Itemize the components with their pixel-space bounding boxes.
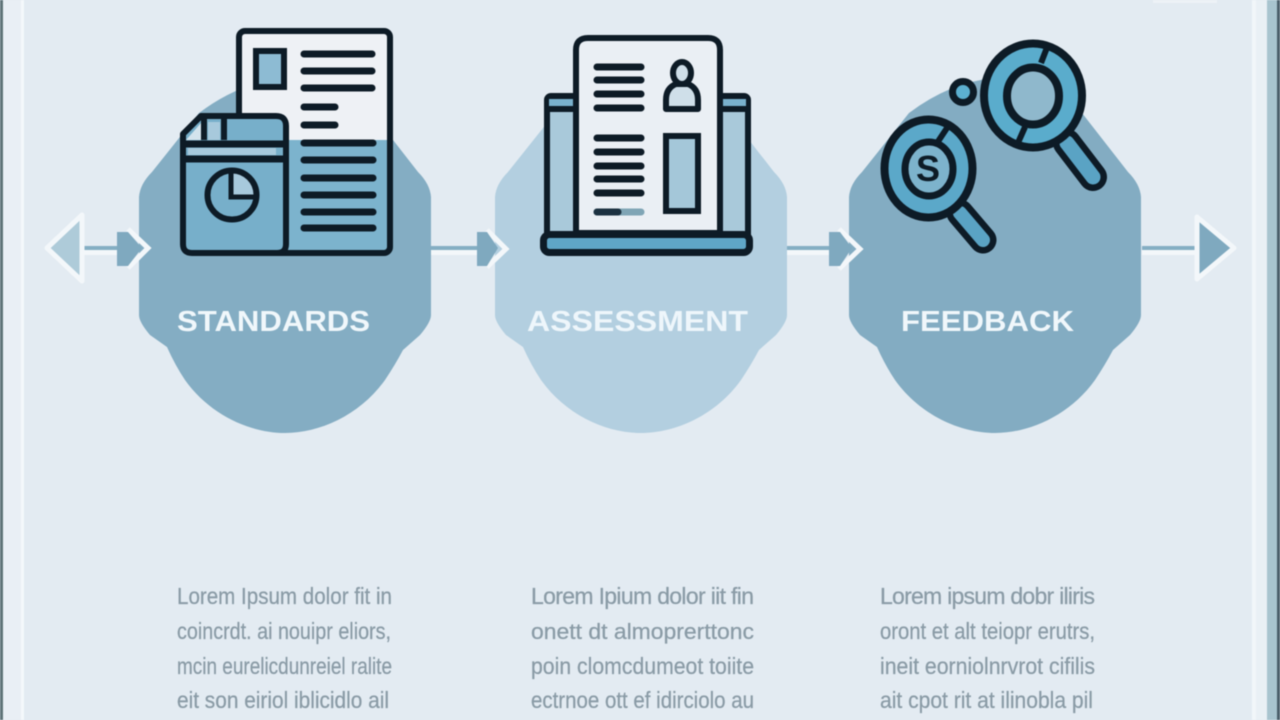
icon part: front card with pie (183, 114, 286, 253)
text block: assessment description: onett dt almoprerttonc (531, 619, 754, 644)
panel: feedback blob (849, 78, 1141, 433)
panel: assessment blob (495, 78, 787, 433)
arrow: double-headed start arrow (47, 215, 148, 281)
heading: assessment: ASSESSMENT (527, 306, 748, 338)
text block: assessment description: Lorem Ipium dolor iit fin (531, 583, 754, 609)
text block: standards description: Lorem Ipsum dolor fit in (177, 583, 392, 609)
icon part: large magnifier (984, 44, 1093, 177)
icon: magnifying glasses (884, 44, 1093, 240)
text block: assessment description (531, 583, 754, 713)
icon part: laptop frame (544, 96, 750, 252)
text block: feedback description: ait cpot rit at ilinobla pil (880, 687, 1093, 713)
text block: feedback description: ineit eorniolnrvrot cifilis (880, 653, 1095, 679)
arrow: assessment to feedback (787, 229, 860, 269)
icon part: small circle (952, 82, 974, 102)
text block: assessment description: poin clomcdumeot toiite (531, 653, 754, 679)
text block: feedback description (880, 583, 1095, 713)
icon part: dollar magnifier: S (916, 148, 940, 189)
icon part: dollar magnifier (884, 120, 983, 240)
text block: standards description: coincrdt. ai nouipr eliors, (177, 618, 391, 644)
text block: standards description: mcin eurelicdunreiel ralite (177, 653, 392, 679)
text block: assessment description: ectrnoe ott ef idirciolo au (531, 687, 754, 713)
heading: standards: STANDARDS (177, 306, 370, 338)
icon: assessment form on laptop (544, 38, 750, 252)
icon part: form sheet (576, 38, 720, 233)
arrow: standards to assessment (431, 230, 506, 267)
icon: documents with pie chart (183, 31, 390, 253)
icon part: back document (239, 31, 390, 253)
panel: standards blob (139, 78, 431, 433)
arrow: end arrow (1142, 217, 1234, 279)
text block: feedback description: Lorem ipsum dobr iliris (880, 583, 1095, 609)
heading: feedback: FEEDBACK (901, 306, 1074, 338)
text block: standards description: eit son eiriol iblicidlo ail (177, 687, 389, 713)
text block: feedback description: oront et alt teiopr erutrs, (880, 618, 1095, 644)
text block: standards description (177, 583, 392, 713)
